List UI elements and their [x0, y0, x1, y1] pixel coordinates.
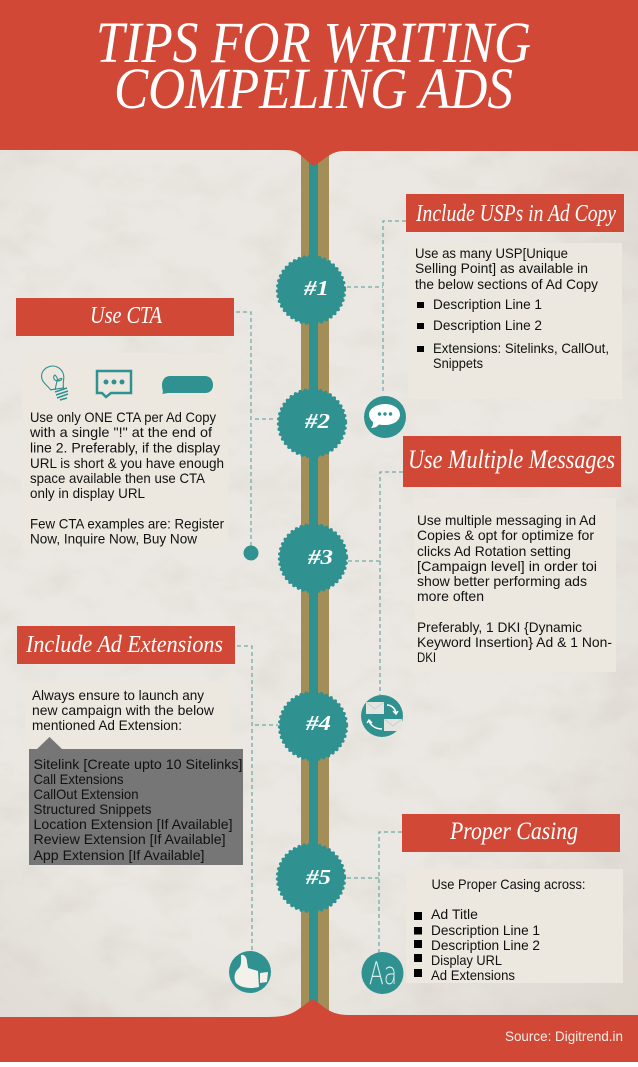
- icon: typography Aa: Aa: [369, 956, 397, 992]
- icon: connector dot: [244, 546, 258, 560]
- body text: multiple messages: more often: [417, 588, 484, 604]
- intro text: Always ensure to launch any: [32, 687, 204, 703]
- dashed connector lines: [236, 221, 406, 953]
- body text: proper casing: Description Line 2: [431, 937, 540, 953]
- icon: typography Aa: [362, 952, 404, 994]
- heading: use CTA: Use CTA: [90, 303, 162, 329]
- step badge 3: #3: [307, 545, 333, 569]
- body text: proper casing: [414, 876, 586, 983]
- step badge 3: [280, 524, 346, 592]
- body text: use CTA: [29, 409, 224, 546]
- body text: multiple messages: Keyword Insertion} Ad & 1 Non-: [417, 634, 612, 650]
- body text: multiple messages: Use multiple messaging in Ad: [417, 512, 596, 528]
- footer banner: [0, 999, 638, 1062]
- body text: USPs: Description Line 2: [433, 317, 542, 333]
- step badge 1: #1: [303, 276, 329, 300]
- callout: extension list: Structured Snippets: [34, 801, 152, 817]
- intro text: new campaign with the below: [32, 702, 215, 718]
- body text: USPs: Use as many USP[Unique: [415, 245, 568, 261]
- step badge 1: [278, 256, 344, 324]
- body text: proper casing: Use Proper Casing across:: [432, 876, 586, 892]
- body text: use CTA: Now, Inquire Now, Buy Now: [30, 530, 198, 546]
- body text: proper casing: Ad Title: [431, 906, 478, 922]
- central timeline band: [301, 150, 329, 1020]
- step badge 2: [278, 390, 346, 456]
- source credit: Source: Digitrend.in: [505, 1028, 623, 1044]
- callout: extension list: Location Extension [If Available]: [34, 816, 233, 832]
- body text: multiple messages: [417, 512, 612, 665]
- intro text: [32, 687, 215, 733]
- body text: use CTA: with a single "!" at the end of: [29, 424, 212, 440]
- body text: use CTA: Use only ONE CTA per Ad Copy: [30, 409, 216, 425]
- body text: use CTA: line 2. Preferably, if the display: [30, 440, 220, 456]
- callout: extension list: Review Extension [If Available]: [34, 831, 226, 847]
- body text: USPs: Extensions: Sitelinks, CallOut,: [433, 340, 609, 356]
- body text: proper casing: Ad Extensions: [431, 967, 515, 983]
- callout: extension list: CallOut Extension: [34, 786, 138, 802]
- body text: USPs: Selling Point] as available in: [415, 260, 588, 276]
- body text: USPs: Snippets: [433, 355, 483, 371]
- body text: USPs: [415, 245, 609, 371]
- icon: thumbs up: [229, 951, 271, 993]
- body text: multiple messages: [Campaign level] in order toi: [417, 558, 597, 574]
- title: [96, 10, 531, 121]
- intro text: mentioned Ad Extension:: [32, 717, 182, 733]
- body text: use CTA: space available then use CTA: [30, 470, 206, 486]
- title: COMPELING ADS: [114, 56, 513, 121]
- heading: include ad extensions: Include Ad Extensions: [25, 632, 223, 658]
- panel: use CTA: [16, 298, 234, 548]
- heading: use CTA: [16, 298, 234, 336]
- icon: square speech bubble: [97, 371, 131, 397]
- step badge 4: #4: [305, 711, 331, 735]
- body text: multiple messages: clicks Ad Rotation setting: [417, 543, 571, 559]
- callout: extension list: [29, 737, 243, 865]
- callout: extension list: App Extension [If Available]: [34, 847, 204, 863]
- step badge 4: [280, 692, 346, 760]
- icon: solid speech bubble: [162, 376, 213, 394]
- body text: USPs: Description Line 1: [433, 296, 542, 312]
- panel: include ad extensions: [17, 626, 243, 865]
- heading: use multiple messages: [403, 436, 621, 487]
- step badge 2: #2: [304, 409, 331, 433]
- panel: proper casing: [402, 814, 623, 983]
- panel: include USPs: [406, 194, 624, 399]
- heading: include ad extensions: [17, 626, 235, 664]
- body text: proper casing: Description Line 1: [431, 922, 540, 938]
- step badge 5: #5: [305, 865, 331, 889]
- heading: include USPs: [406, 194, 624, 232]
- body text: multiple messages: Preferably, 1 DKI {Dynamic: [417, 619, 582, 635]
- body text: USPs: the below sections of Ad Copy: [415, 276, 598, 292]
- step badge 5: [278, 844, 344, 912]
- body text: multiple messages: DKI: [417, 649, 436, 665]
- icon: light bulb: [40, 364, 68, 400]
- body text: proper casing: Display URL: [431, 952, 502, 968]
- heading: proper casing: Proper Casing: [449, 818, 578, 845]
- body text: use CTA: URL is short & you have enough: [30, 455, 224, 471]
- callout: extension list: Call Extensions: [34, 771, 124, 787]
- callout: extension list: Sitelink [Create upto 10 Sitelinks]: [34, 756, 242, 772]
- icon: rotating mail: [361, 695, 403, 737]
- title banner: [0, 0, 638, 166]
- panel: use multiple messages: [403, 436, 621, 672]
- body text: use CTA: only in display URL: [30, 485, 145, 501]
- icon: chat bubble: [364, 396, 406, 438]
- body text: use CTA: Few CTA examples are: Register: [30, 516, 224, 532]
- heading: proper casing: [402, 814, 620, 852]
- body text: multiple messages: Copies & opt for optimize for: [417, 527, 594, 543]
- body text: multiple messages: show better performing ads: [417, 573, 587, 589]
- title: TIPS FOR WRITING: [96, 10, 531, 75]
